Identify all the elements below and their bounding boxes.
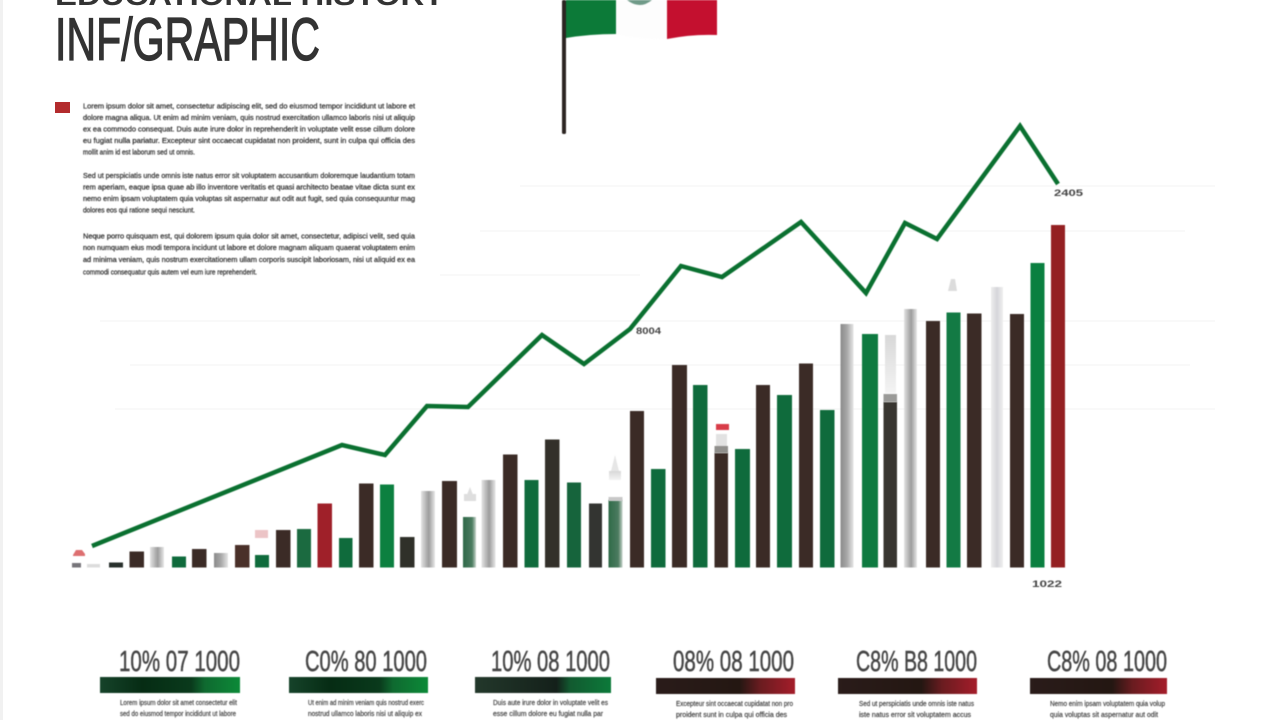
paragraph three: commodi consequatur quis autem vel eum iure reprehenderit. <box>83 270 257 276</box>
stat: column 6: quia voluptas sit aspernatur aut odit <box>1050 712 1158 719</box>
chart: bars and trend line <box>72 126 1083 589</box>
faint chart grid lines <box>100 186 1215 409</box>
data label 2405: 2405 <box>1054 188 1083 198</box>
main heading: INF/GRAPHIC <box>55 6 320 73</box>
paragraph three <box>83 234 415 276</box>
stat: column 3: Duis aute irure dolor in voluptate velit es <box>493 700 608 707</box>
stat: column 4: proident sunt in culpa qui officia des <box>676 712 787 719</box>
stat: column 1: 10% 07 1000 <box>119 646 240 678</box>
stat: column 5: Sed ut perspiciatis unde omnis iste natus <box>859 701 974 708</box>
bars <box>72 225 1065 568</box>
trend line <box>92 126 1058 546</box>
stat: column 1: sed do eiusmod tempor incididunt ut labore <box>120 711 236 718</box>
stat: column 3: esse cillum dolore eu fugiat nulla par <box>493 711 604 718</box>
ghost bar caps <box>73 279 957 556</box>
title block <box>55 0 445 73</box>
paragraph three: non numquam eius modi tempora incidunt ut labore et dolore magnam aliquam quaerat voluptatem enim <box>83 245 415 252</box>
paragraph three: ad minima veniam, quis nostrum exercitationem ullam corporis suscipit laboriosam, nisi ut aliquid ex ea <box>83 257 415 264</box>
stat: column 1 <box>100 646 240 718</box>
paragraph one: dolore magna aliqua. Ut enim ad minim veniam, quis nostrud exercitation ullamco laboris nisi ut aliquip <box>83 115 415 122</box>
stat: column 1: Lorem ipsum dolor sit amet consectetur elit <box>120 700 237 707</box>
stat: column 3: 10% 08 1000 <box>491 646 610 678</box>
page edge strip <box>0 0 3 720</box>
stat: column 6: Nemo enim ipsam voluptatem quia volup <box>1050 701 1165 708</box>
stat: column 2: nostrud ullamco laboris nisi ut aliquip ex <box>308 711 422 718</box>
paragraph two <box>83 173 416 214</box>
data label 8004: 8004 <box>636 326 661 336</box>
paragraph one: eu fugiat nulla pariatur. Excepteur sint occaecat cupidatat non proident, sunt in culpa qui officia des <box>83 138 416 145</box>
stat: column 2: Ut enim ad minim veniam quis nostrud exerc <box>308 700 424 707</box>
paragraph one: Lorem ipsum dolor sit amet, consectetur adipiscing elit, sed do eiusmod tempor incididunt ut labore et <box>83 104 415 110</box>
paragraph two: rem aperiam, eaque ipsa quae ab illo inventore veritatis et quasi architecto beatae vitae dicta sunt ex <box>83 184 416 192</box>
stat: column 6: C8% 08 1000 <box>1047 646 1167 678</box>
stat: column 3 <box>475 646 611 718</box>
intro text block <box>83 104 416 276</box>
stat: column 6 <box>1030 646 1167 719</box>
paragraph one <box>83 104 416 156</box>
stat: column 2: C0% 80 1000 <box>305 646 427 678</box>
stat: column 5 <box>838 646 977 719</box>
stat: column 5: C8% B8 1000 <box>856 646 977 678</box>
paragraph two: dolores eos qui ratione sequi nesciunt. <box>83 208 195 214</box>
stat: column 2 <box>289 646 428 718</box>
stat: column 5: iste natus error sit voluptatem accus <box>859 712 971 719</box>
stat: column 4 <box>656 646 795 719</box>
icon: red bullet square <box>55 102 70 113</box>
icon: Mexican flag <box>562 0 717 134</box>
paragraph one: mollit anim id est laborum sed ut omnis. <box>83 150 195 156</box>
stat: column 4: Excepteur sint occaecat cupidatat non pro <box>676 701 793 708</box>
paragraph two: nemo enim ipsam voluptatem quia voluptas sit aspernatur aut odit aut fugit, sed quia consequuntur mag <box>83 196 415 203</box>
stat: column 4: 08% 08 1000 <box>673 646 794 678</box>
paragraph two: Sed ut perspiciatis unde omnis iste natus error sit voluptatem accusantium doloremque laudantium totam <box>83 173 415 180</box>
paragraph three: Neque porro quisquam est, qui dolorem ipsum quia dolor sit amet, consectetur, adipisci velit, sed quia <box>83 234 415 240</box>
paragraph one: ex ea commodo consequat. Duis aute irure dolor in reprehenderit in voluptate velit esse cillum dolore <box>83 126 415 134</box>
data label 1022: 1022 <box>1032 579 1062 589</box>
